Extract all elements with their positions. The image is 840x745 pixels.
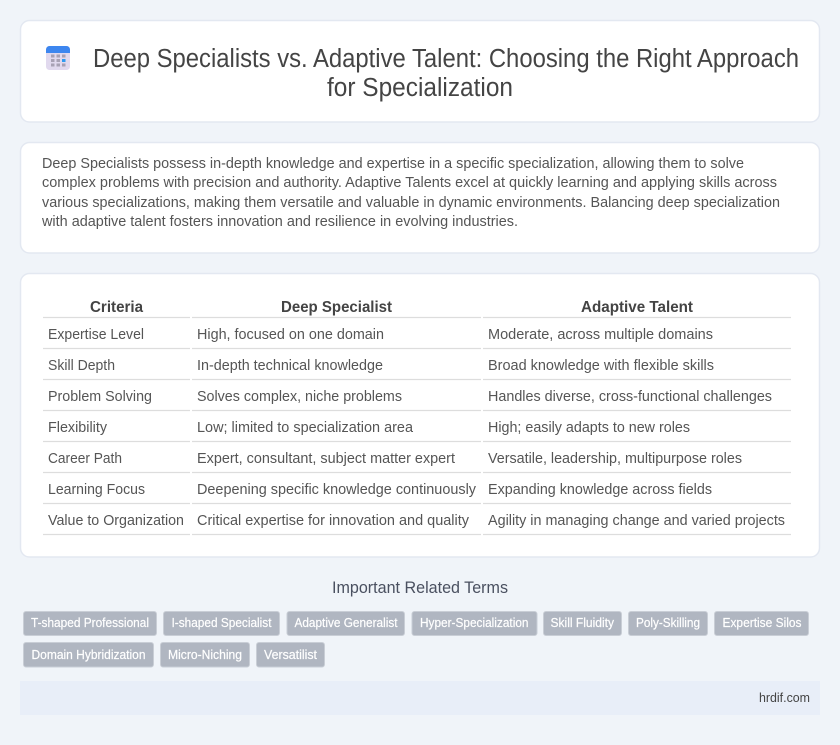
text block: intro paragraph: various specializations, making them versatile and valuable in dynamic environments. Balancing deep specialization (42, 195, 780, 211)
panel: header (20, 20, 820, 122)
table header: Deep Specialist (281, 299, 393, 316)
tag: Micro-Niching: Micro-Niching (168, 648, 242, 662)
footer: hrdif.com (759, 691, 810, 705)
row: problem solving: Solves complex, niche problems (197, 389, 402, 405)
text block: intro paragraph: Deep Specialists possess in-depth knowledge and expertise in a specific specialization, allowing them to solve (42, 156, 744, 172)
related term tags (24, 612, 808, 667)
tag: T-shaped Professional (24, 612, 156, 636)
row: career path: Career Path (48, 451, 122, 467)
row: value to organization (48, 513, 785, 529)
row: expertise level: Moderate, across multiple domains (488, 327, 713, 343)
row: value to organization: Agility in managing change and varied projects (488, 513, 785, 529)
text block: intro paragraph: complex problems with precision and authority. Adaptive Talents excel at quickly learning and applying skills across (42, 175, 777, 191)
tag: Hyper-Specialization: Hyper-Specialization (420, 616, 529, 630)
row: skill depth (48, 358, 714, 374)
row: career path: Versatile, leadership, multipurpose roles (488, 451, 742, 467)
row: problem solving: Problem Solving (48, 389, 152, 405)
tag: Domain Hybridization (24, 642, 154, 667)
panel: comparison table (20, 274, 820, 557)
title (93, 45, 799, 102)
text block: intro paragraph: with adaptive talent fosters innovation and resilience in evolving industries. (41, 214, 518, 230)
row: skill depth: In-depth technical knowledge (197, 358, 383, 374)
tag: I-shaped Specialist: I-shaped Specialist (172, 616, 272, 630)
row: problem solving (48, 389, 772, 405)
tag: Domain Hybridization: Domain Hybridization (32, 648, 146, 662)
tag: I-shaped Specialist (164, 612, 280, 636)
row: learning focus: Deepening specific knowledge continuously (197, 482, 477, 498)
icon: calendar (46, 46, 70, 70)
row: learning focus (48, 482, 712, 498)
row: value to organization: Critical expertise for innovation and quality (197, 513, 470, 529)
text block: intro paragraph (41, 156, 780, 230)
row: expertise level: Expertise Level (48, 327, 144, 343)
heading: important related terms: Important Related Terms (332, 579, 508, 597)
tag: Poly-Skilling: Poly-Skilling (636, 616, 700, 630)
row: skill depth: Broad knowledge with flexible skills (488, 358, 714, 374)
row: flexibility: Flexibility (48, 420, 108, 436)
table header: Adaptive Talent (581, 299, 694, 316)
row: career path: Expert, consultant, subject matter expert (197, 451, 455, 467)
tag: Poly-Skilling (628, 612, 708, 636)
tag: Micro-Niching (160, 642, 250, 667)
tag: Adaptive Generalist: Adaptive Generalist (294, 616, 398, 630)
row: expertise level: High, focused on one domain (197, 327, 384, 343)
row: skill depth: Skill Depth (48, 358, 115, 374)
title: Deep Specialists vs. Adaptive Talent: Choosing the Right Approach (93, 45, 799, 73)
tag: Skill Fluidity: Skill Fluidity (550, 616, 615, 630)
row: learning focus: Expanding knowledge across fields (488, 482, 712, 498)
table header (90, 299, 694, 316)
table header: Criteria (90, 299, 143, 316)
footer (20, 681, 820, 715)
row: career path (48, 451, 742, 467)
row: learning focus: Learning Focus (48, 482, 145, 498)
row: flexibility: Low; limited to specialization area (197, 420, 414, 436)
tag: Versatilist (256, 642, 324, 667)
tag: Skill Fluidity (544, 612, 622, 636)
row: problem solving: Handles diverse, cross-functional challenges (488, 389, 772, 405)
tag: Hyper-Specialization (412, 612, 537, 636)
tag: Expertise Silos: Expertise Silos (722, 616, 802, 630)
row: flexibility: High; easily adapts to new roles (488, 420, 690, 436)
title: for Specialization (327, 74, 513, 102)
tag: Versatilist: Versatilist (264, 648, 318, 662)
row: expertise level (48, 327, 713, 343)
row: flexibility (48, 420, 690, 436)
panel: introduction (20, 142, 820, 253)
tag: Adaptive Generalist (287, 612, 404, 636)
row: value to organization: Value to Organization (48, 513, 184, 529)
tag: T-shaped Professional: T-shaped Professional (31, 616, 149, 630)
tag: Expertise Silos (714, 612, 808, 636)
